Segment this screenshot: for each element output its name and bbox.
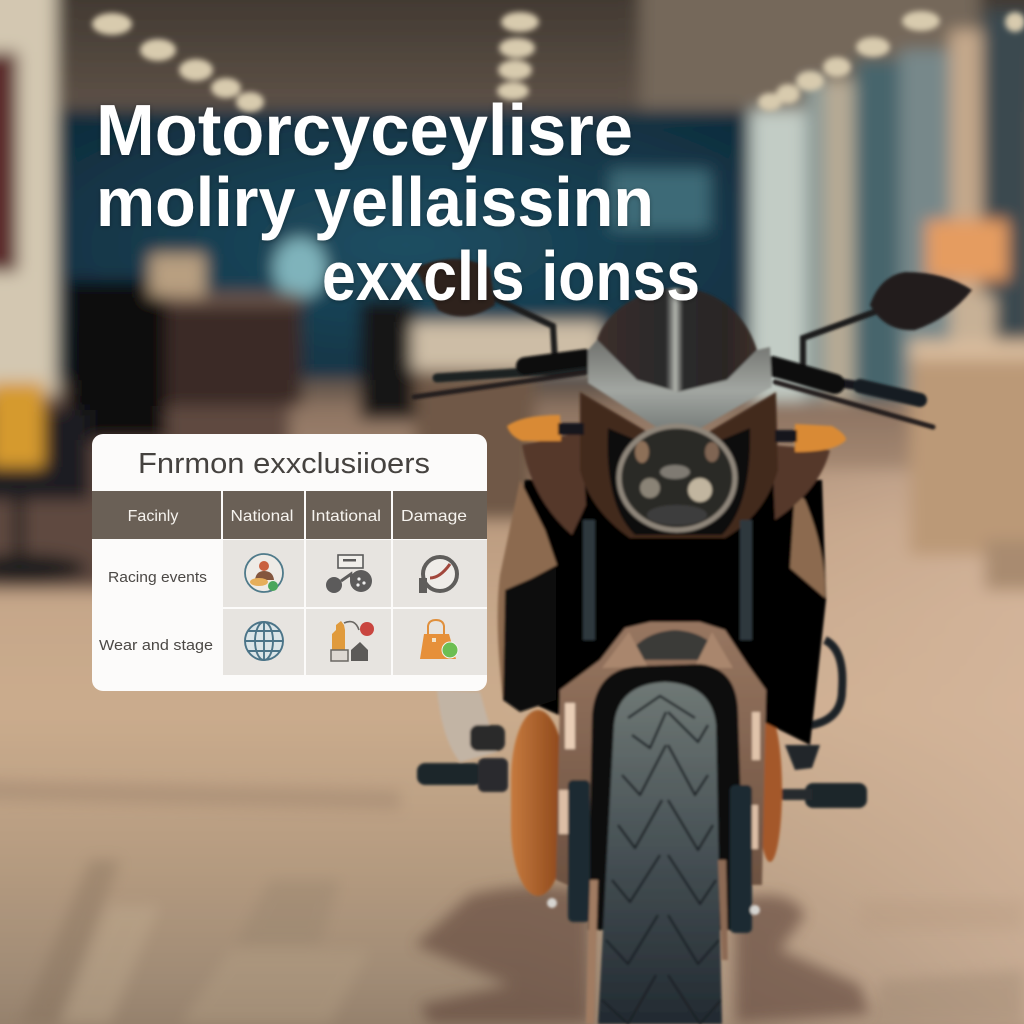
turn signals (507, 415, 846, 452)
black headlight surround (608, 428, 750, 535)
ceiling lights (92, 11, 1024, 112)
handlebars (414, 358, 933, 427)
headlight (619, 426, 735, 530)
table heading: Fnrmon exxclusiioers (138, 448, 430, 480)
icon: machine parts (326, 555, 372, 593)
panel: exclusions table card (92, 434, 487, 691)
motorcycle (414, 259, 972, 1024)
icon: person gauge (245, 554, 283, 592)
front forks (583, 520, 752, 640)
icon: shopping bag (420, 620, 458, 659)
icon: globe (245, 622, 283, 660)
black fender arch (588, 664, 745, 930)
right mirror (803, 272, 972, 368)
table header row: Intational (311, 508, 381, 525)
icon: gauge dial (419, 557, 457, 593)
windshield (597, 288, 757, 392)
table header row (92, 491, 487, 539)
fork legs and axle (547, 780, 760, 933)
front tyre with chevron tread (586, 682, 728, 1024)
foot pegs (417, 758, 867, 808)
floor shadow under motorcycle (415, 886, 870, 1024)
title: exxclls ionss (322, 237, 700, 315)
table body cells (223, 540, 487, 675)
fairing side panels (522, 432, 830, 535)
left mirror (415, 259, 555, 362)
table header row: Facinly (128, 508, 178, 525)
rear engine guards and crash bar (437, 640, 842, 770)
orange brake discs (511, 710, 782, 896)
icon: bottle and bag (331, 621, 374, 661)
brown headlight fairing (580, 392, 778, 538)
table header row: Damage (401, 508, 467, 525)
title: Motorcyceylisre (96, 91, 633, 171)
silver cowl (588, 340, 772, 441)
row label: wear and stage: Wear and stage (99, 637, 213, 654)
table header row: National (230, 508, 294, 525)
title (96, 91, 700, 315)
title: moliry yellaissinn (96, 163, 654, 241)
floor planks (0, 780, 1024, 1024)
side tank shrouds (498, 480, 825, 712)
black body frame (503, 480, 826, 745)
front fender (556, 622, 766, 895)
row label: racing events: Racing events (108, 570, 207, 586)
